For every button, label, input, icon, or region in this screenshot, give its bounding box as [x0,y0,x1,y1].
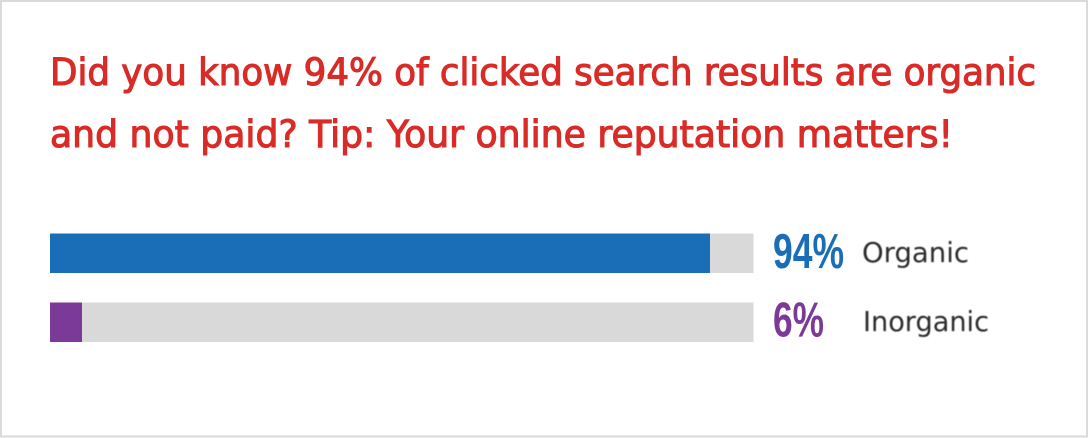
title [50,51,1036,156]
title: Did you know 94% of clicked search results are organic [50,51,1036,94]
label: Inorganic: Inorganic [863,305,989,338]
value: 94%: 94% [773,225,844,279]
bar chart: organic 94% [50,225,969,279]
value: 6%: 6% [773,294,824,348]
bar chart: inorganic 6% [50,294,989,348]
label: Organic: Organic [862,236,969,269]
title: and not paid? Tip: Your online reputation matters! [50,113,953,156]
